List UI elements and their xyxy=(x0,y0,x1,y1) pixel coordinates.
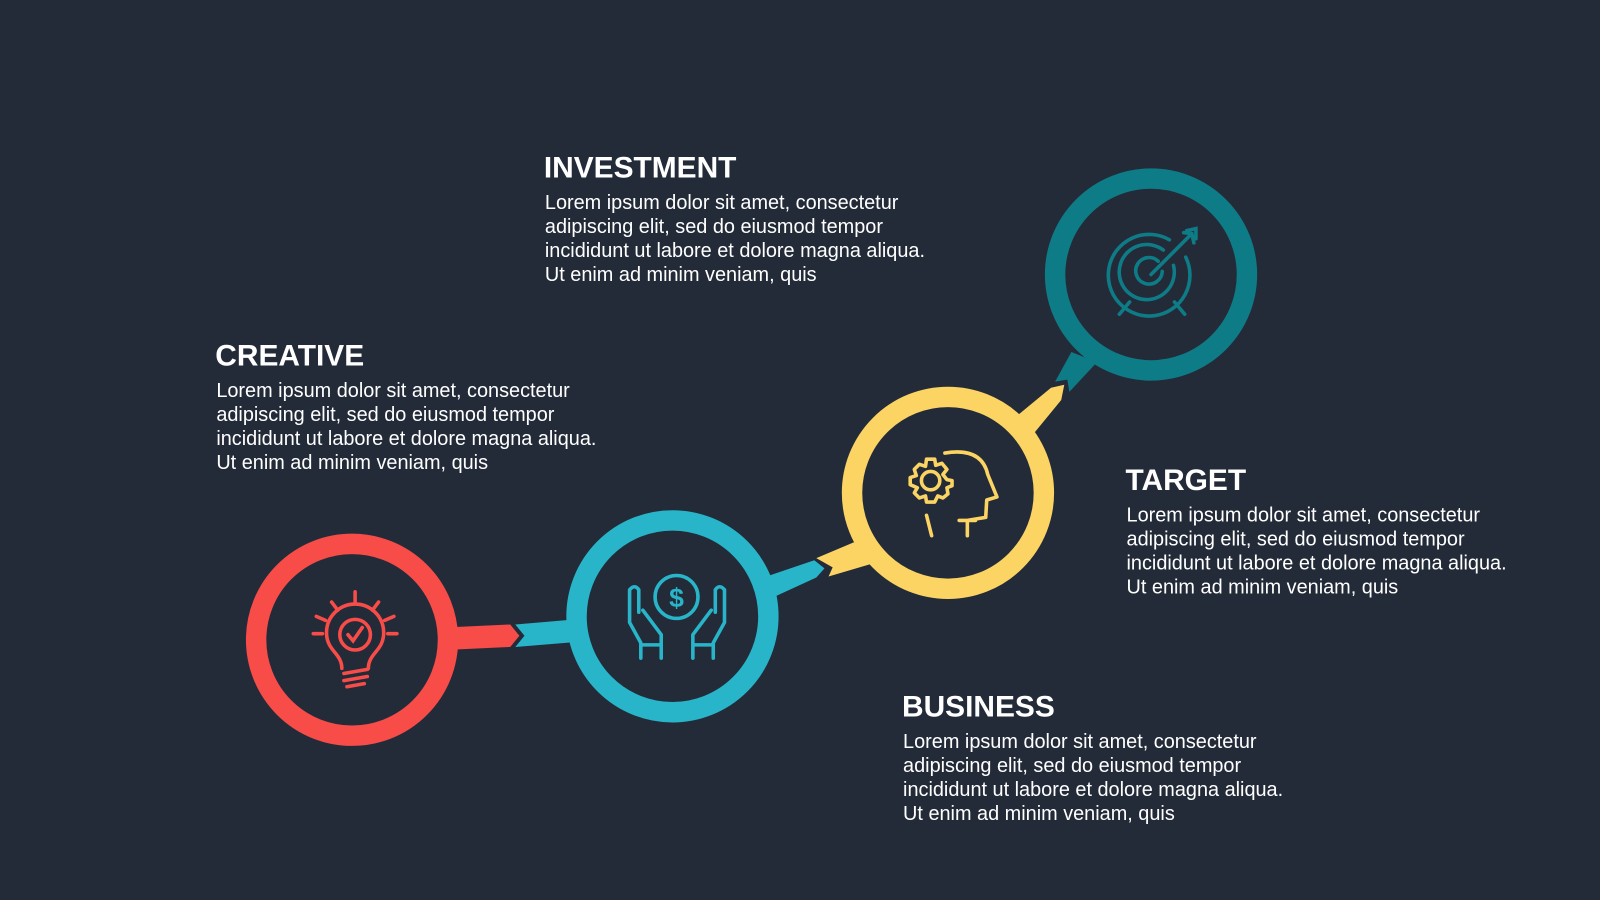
text: target: incididunt ut labore et dolore magna aliqua. xyxy=(1127,552,1507,574)
circle: yellow target xyxy=(852,397,1044,589)
text: business: incididunt ut labore et dolore magna aliqua. xyxy=(903,779,1283,801)
text: investment: INVESTMENT xyxy=(544,152,736,185)
text: creative: Ut enim ad minim veniam, quis xyxy=(216,452,488,474)
text: creative: adipiscing elit, sed do eiusmod tempor xyxy=(216,404,555,426)
text: target: TARGET xyxy=(1126,464,1246,497)
text: business: adipiscing elit, sed do eiusmod tempor xyxy=(903,755,1242,777)
icon: head with gear xyxy=(910,452,997,536)
text: creative: incididunt ut labore et dolore magna aliqua. xyxy=(216,428,596,450)
text: investment: Lorem ipsum dolor sit amet, consectetur xyxy=(545,192,899,214)
circle: red creative xyxy=(256,544,448,736)
text: creative: Lorem ipsum dolor sit amet, consectetur xyxy=(216,380,570,402)
text: target: Ut enim ad minim veniam, quis xyxy=(1127,576,1398,598)
icon: target xyxy=(1108,229,1196,316)
connector: blue to yellow xyxy=(760,539,873,600)
text: target xyxy=(1126,464,1507,598)
text: target: Lorem ipsum dolor sit amet, consectetur xyxy=(1127,504,1480,526)
circle: blue investment xyxy=(577,520,768,712)
connector: red to blue xyxy=(445,619,578,650)
text: target: adipiscing elit, sed do eiusmod tempor xyxy=(1127,528,1465,550)
text: business xyxy=(902,690,1283,825)
circle: teal business xyxy=(1055,179,1247,370)
icon: hands with coin: $ xyxy=(669,583,684,613)
connector: yellow to teal xyxy=(1016,352,1097,434)
text: investment: Ut enim ad minim veniam, quis xyxy=(545,264,817,286)
text: investment xyxy=(544,152,925,286)
text: investment: incididunt ut labore et dolore magna aliqua. xyxy=(545,240,925,262)
text: creative xyxy=(215,339,596,474)
text: creative: CREATIVE xyxy=(215,339,364,372)
icon: light bulb xyxy=(313,592,397,687)
text: business: BUSINESS xyxy=(902,690,1055,723)
icon: hands with coin xyxy=(630,576,724,658)
text: business: Lorem ipsum dolor sit amet, consectetur xyxy=(903,731,1257,753)
text: business: Ut enim ad minim veniam, quis xyxy=(903,803,1175,825)
text: investment: adipiscing elit, sed do eiusmod tempor xyxy=(545,216,883,238)
